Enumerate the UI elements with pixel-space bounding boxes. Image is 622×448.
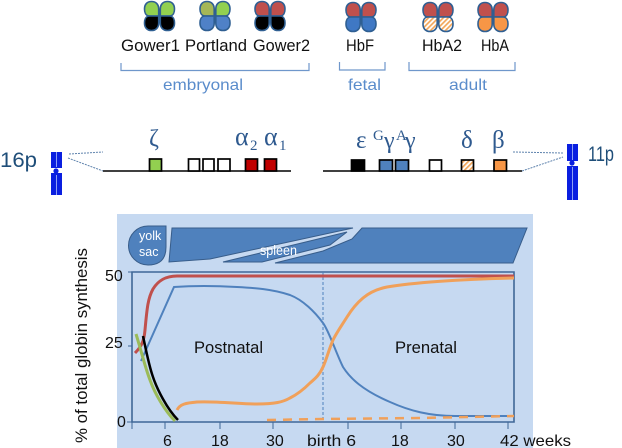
stage labels: adult: [449, 77, 488, 94]
alpha cluster gene labels: 2: [250, 138, 258, 154]
curve: epsilon globin: [143, 336, 178, 420]
icon: HbF hemoglobin: [346, 2, 376, 32]
beta cluster gene labels: ε: [356, 127, 366, 154]
icon: HbA hemoglobin: [478, 2, 508, 32]
icon: yolk sac: sac: [139, 245, 158, 259]
curve: delta globin: [267, 416, 514, 420]
region label: Postnatal: Postnatal: [194, 339, 263, 357]
icon: Gower2 hemoglobin: [255, 2, 285, 30]
beta globin gene cluster: [323, 160, 522, 171]
zoom lines to alpha cluster: [68, 152, 103, 171]
hemoglobin names: HbA: [481, 37, 509, 55]
curve: zeta globin: [136, 334, 175, 421]
y axis title: % of total globin synthesis: [72, 248, 91, 443]
stage labels: fetal: [348, 77, 381, 94]
beta cluster gene labels: γ: [404, 128, 416, 154]
hemoglobin names: Portland: [185, 37, 247, 55]
beta cluster gene labels: [356, 127, 505, 154]
hemoglobin names: Gower1: [121, 37, 180, 55]
chromosome 16p label: 16p: [0, 149, 37, 172]
region label: Prenatal: Prenatal: [395, 339, 457, 357]
icon: yolk sac: [128, 226, 166, 265]
alpha cluster gene labels: 1: [279, 138, 286, 154]
beta cluster gene labels: β: [492, 127, 505, 154]
curve: beta globin: [177, 278, 514, 410]
alpha cluster gene labels: α: [264, 122, 278, 151]
beta cluster gene labels: δ: [461, 127, 473, 154]
alpha cluster gene labels: [149, 122, 286, 154]
x axis tick labels: [163, 433, 571, 448]
stage labels: embryonal: [163, 77, 243, 94]
beta cluster gene labels: G: [373, 128, 384, 144]
y axis tick labels: 0: [117, 414, 126, 431]
axes frame with ticks: [127, 272, 514, 429]
panel: globin synthesis chart: [72, 214, 571, 448]
hemoglobin names: [121, 37, 509, 55]
icon: Gower1 hemoglobin: [144, 2, 174, 30]
y axis tick labels: 25: [105, 335, 123, 352]
stage labels: [163, 77, 488, 94]
beta cluster gene labels: γ: [383, 128, 395, 154]
beta cluster gene labels: A: [396, 128, 407, 144]
chromosome 16 icon: [51, 152, 62, 195]
zoom lines to beta cluster: [513, 152, 563, 171]
birth marker: [322, 272, 324, 422]
hemoglobin names: HbA2: [422, 37, 462, 55]
hemoglobin names: Gower2: [253, 37, 310, 55]
chromosome 11 icon: [567, 144, 578, 200]
chromosome 11p label: 11p: [588, 143, 614, 166]
icon: HbA2 hemoglobin: [423, 2, 453, 32]
curve: gamma globin: [141, 286, 513, 416]
icon: Portland hemoglobin: [200, 2, 230, 30]
alpha cluster gene labels: ζ: [149, 126, 159, 152]
alpha cluster gene labels: α: [235, 122, 249, 151]
spleen and bone marrow shapes: spleen: [260, 243, 297, 258]
icon: yolk sac: yolk: [139, 229, 162, 243]
y axis tick labels: 50: [105, 268, 123, 285]
curve: alpha globin: [135, 276, 514, 353]
hemoglobin names: HbF: [346, 37, 374, 55]
panel background: [117, 214, 533, 448]
y axis tick labels: [105, 268, 126, 431]
alpha globin gene cluster: [103, 159, 291, 171]
developmental stage brackets: [121, 62, 515, 70]
spleen and bone marrow shapes: [169, 228, 527, 263]
